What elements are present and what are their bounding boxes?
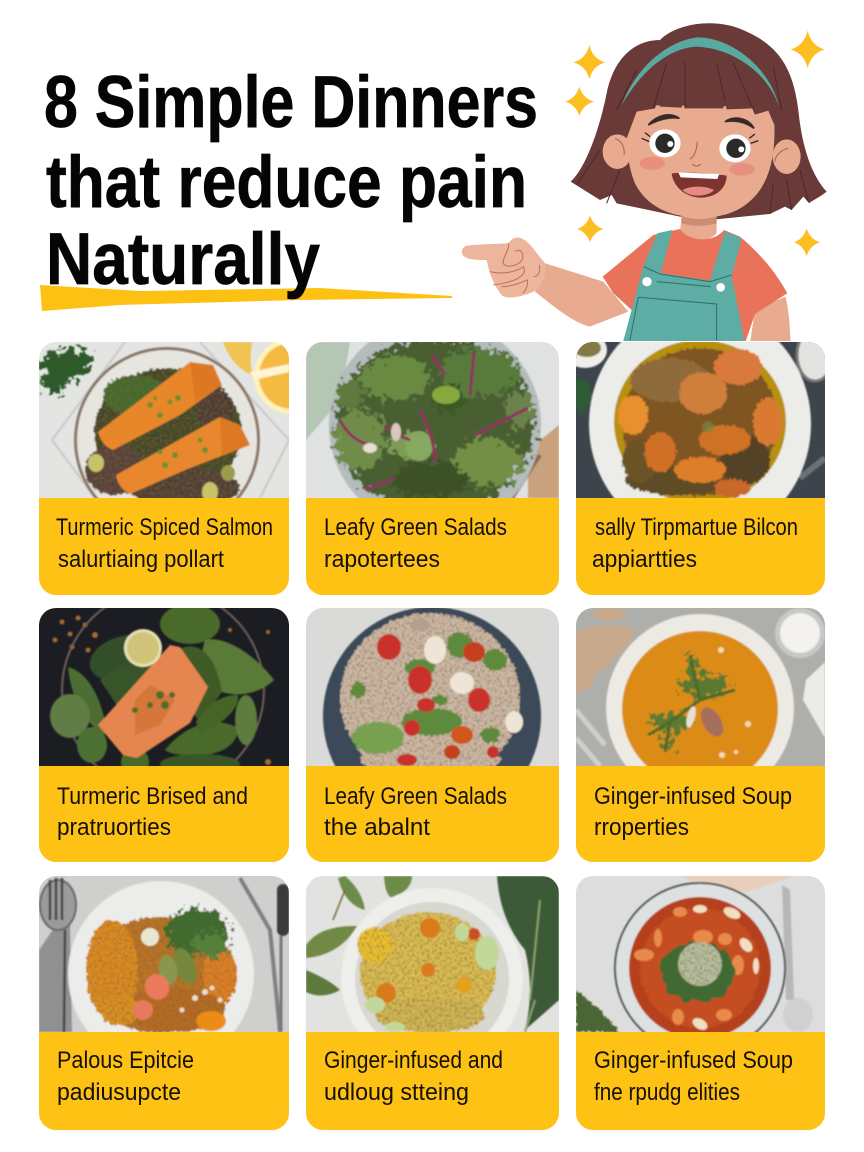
title (44, 62, 538, 300)
caption bar (39, 766, 289, 862)
caption bar (39, 498, 289, 595)
panel: Turmeric Brised salmon (39, 589, 289, 862)
caption text: Ginger-infused Soup (594, 1047, 793, 1074)
photo: green salad bowl (306, 342, 559, 498)
panel: Leafy Green Salads 1 (306, 319, 559, 595)
caption text: Turmeric Spiced Salmon (56, 514, 273, 541)
photo: yellow grain bowl (306, 876, 559, 1032)
photo: vegetable bowl plate (39, 876, 289, 1032)
caption text: fne rpudg elities (594, 1079, 740, 1106)
caption text: Leafy Green Salads (324, 514, 507, 541)
eyebrows (648, 115, 754, 128)
ears (603, 134, 632, 169)
panel: Turmeric curry bowl (576, 342, 825, 595)
panel: Ginger-infused Soup 1 (576, 608, 825, 862)
panel: Leafy Green Salads 2 (306, 607, 559, 862)
hair back (571, 23, 827, 219)
caption text: Turmeric Brised and (57, 783, 248, 810)
underline swoosh (40, 285, 452, 311)
caption text: the abalnt (324, 814, 430, 841)
caption bar (576, 498, 825, 595)
caption bar (39, 1032, 289, 1130)
right arm (750, 297, 791, 343)
panel: Ginger-infused Soup 2 (576, 876, 825, 1130)
caption text: rroperties (594, 814, 689, 841)
hand (462, 238, 545, 297)
shirt (603, 229, 787, 343)
cheeks and nose (640, 157, 665, 170)
panel: Palous Epitcie (39, 876, 289, 1130)
eyes (649, 129, 681, 157)
caption text: Palous Epitcie (57, 1047, 194, 1074)
title: 8 Simple Dinners (44, 62, 538, 143)
left arm (535, 263, 628, 327)
caption bar (576, 766, 825, 862)
caption bar (576, 1032, 825, 1130)
title: that reduce pain (46, 142, 527, 223)
caption text: Ginger-infused Soup (594, 783, 792, 810)
caption bar (306, 766, 559, 862)
mouth (672, 173, 727, 198)
caption text: Leafy Green Salads (324, 783, 507, 810)
photo: orange soup bowl (576, 608, 825, 766)
photo: curry plate (576, 342, 825, 498)
panel: Turmeric Spiced Salmon (39, 342, 289, 595)
bangs (626, 105, 774, 138)
caption text: rapotertees (324, 546, 440, 573)
photo: tomato soup bowl (576, 876, 825, 1032)
caption text: appiartties (592, 546, 697, 573)
sparkles (565, 31, 825, 256)
photo: salmon on spinach (39, 608, 289, 766)
character: girl pointing (462, 23, 827, 343)
headband (622, 37, 779, 107)
overalls (623, 230, 745, 343)
photo: quinoa salad bowl (306, 608, 559, 766)
panel: Ginger-infused and (306, 876, 559, 1130)
face (626, 105, 775, 217)
photo: salmon plate (39, 342, 289, 498)
caption text: udloug stteing (324, 1079, 469, 1106)
title: Naturally (46, 219, 320, 300)
caption text: Ginger-infused and (324, 1047, 503, 1074)
neck (680, 216, 717, 240)
caption bar (306, 1032, 559, 1130)
caption bar (306, 498, 559, 595)
caption text: pratruorties (57, 814, 171, 841)
caption text: salurtiaing pollart (58, 546, 224, 573)
caption text: padiusupcte (57, 1079, 181, 1106)
caption text: sally Tirpmartue Bilcon (595, 514, 798, 541)
